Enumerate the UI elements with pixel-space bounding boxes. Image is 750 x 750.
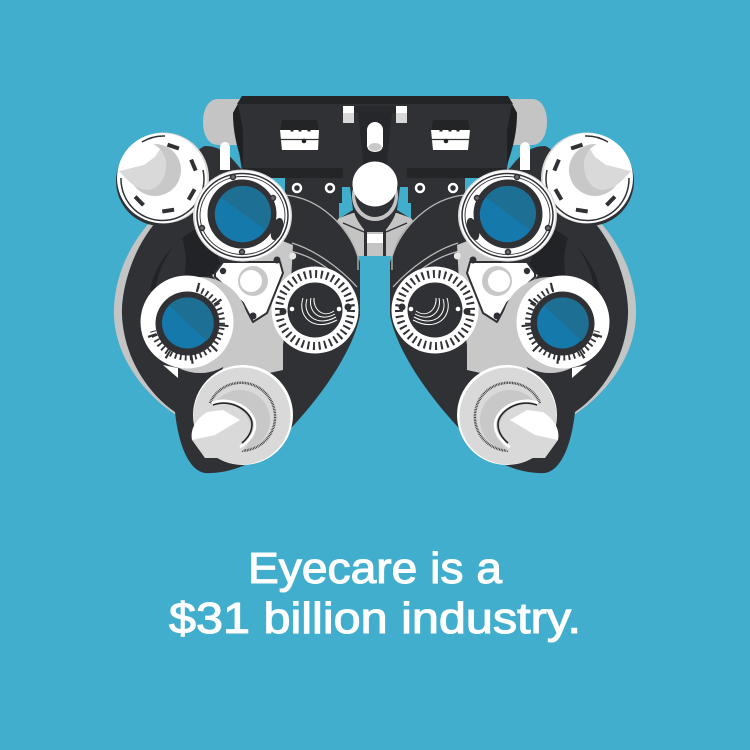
lower lens housing (502, 276, 610, 373)
left slot plate (280, 120, 319, 150)
upper dial (116, 132, 209, 226)
lower knob (192, 365, 293, 465)
dark shadow patch (150, 225, 225, 292)
lower right blue lens (537, 297, 589, 348)
dark body (390, 146, 628, 473)
upper dial (541, 132, 634, 226)
right slot plate (431, 120, 470, 150)
left and right square pins (343, 106, 407, 123)
silver bracket (457, 240, 538, 385)
white arm (220, 142, 230, 170)
lower knob (457, 365, 558, 465)
upper left blue lens (215, 186, 271, 242)
white plate (454, 252, 535, 322)
center capsule (367, 122, 383, 152)
dark body (122, 146, 360, 473)
upper right blue lens (480, 186, 536, 242)
lens shadow triangle (572, 365, 587, 378)
gray outer rim (550, 222, 636, 426)
left washers (293, 184, 334, 192)
headline: $31 billion industry. (169, 594, 581, 643)
center gray bracket (330, 213, 420, 256)
white arm (520, 142, 530, 170)
lens shadow triangle (163, 365, 178, 378)
dark shadow patch (525, 225, 600, 292)
body contour lines (392, 195, 465, 295)
right washers (416, 184, 457, 192)
white plate (215, 252, 296, 322)
blue gaps beside center post (339, 187, 411, 218)
gray outer rim (114, 222, 200, 426)
right eyepiece assembly (390, 132, 636, 473)
scale wheel (392, 266, 478, 354)
lower left blue lens (162, 297, 214, 348)
center ball post (352, 162, 398, 232)
left gray cylinder (203, 99, 245, 145)
body contour lines (285, 195, 358, 295)
top housing (233, 96, 517, 226)
scale wheel (272, 266, 358, 354)
headline: Eyecare is a (248, 544, 503, 593)
silver bracket (212, 240, 293, 385)
left eyepiece assembly (114, 132, 360, 473)
lower lens housing (140, 276, 248, 373)
upper lens housing (458, 170, 557, 262)
right gray cylinder (505, 99, 547, 145)
upper lens housing (193, 170, 292, 262)
headline (169, 544, 581, 643)
